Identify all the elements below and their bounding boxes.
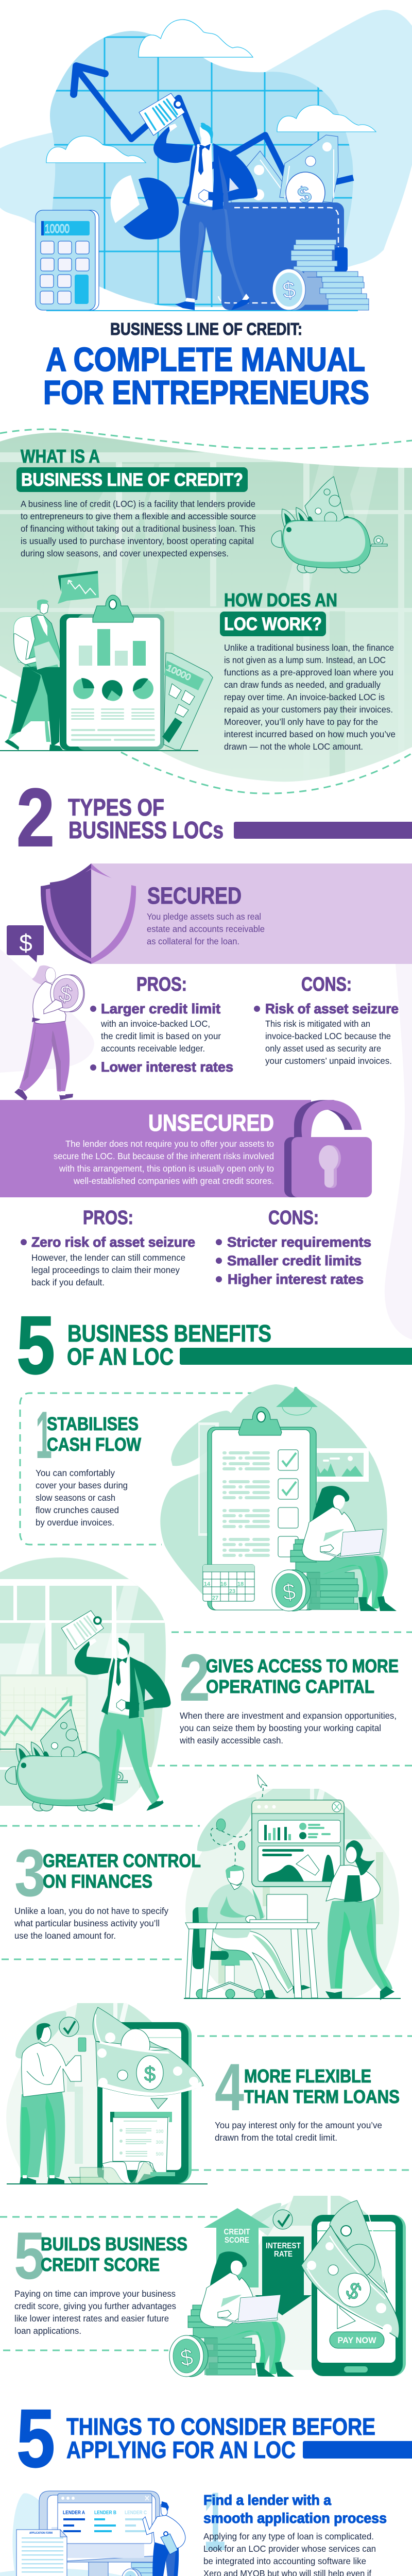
hero background blobs (0, 10, 412, 268)
icon: paper plane with dashed route (211, 1775, 267, 1886)
panel: secured: as collateral for the loan. (147, 936, 239, 946)
cons: secured: Risk of asset seizure (265, 1001, 399, 1016)
pros: unsecured: back if you default. (31, 1277, 105, 1287)
illustration: checklist with woman on coins: 18 (237, 1581, 244, 1587)
panel: what is and how it works background (0, 433, 412, 783)
title: FOR ENTREPRENEURS (43, 374, 369, 411)
icon: wallet (218, 202, 348, 310)
illustration: checklist with woman on coins: 23 (229, 1588, 235, 1595)
pros: unsecured: Zero risk of asset seizure (31, 1234, 195, 1250)
icon: interest rate down arrow: RATE (274, 2250, 293, 2259)
heading: 5 things to consider: APPLYING FOR AN LOC (66, 2436, 296, 2463)
title (43, 319, 369, 411)
panel: secured: SECURED (147, 883, 242, 909)
text block: what is an LOC: is usually used to purchase inventory, boost operating capital (21, 536, 254, 546)
benefit 2 text: When there are investment and expansion opportunities, (180, 1710, 397, 1721)
heading: how does an LOC work: HOW DOES AN (224, 589, 337, 611)
item 1: find a lender: Look for an LOC provider whose services can (203, 2544, 376, 2554)
text block: how an LOC works: is not given as a lump sum. Instead, an LOC (224, 655, 386, 665)
benefit 5 text: credit score, giving you further advantages (14, 2301, 176, 2311)
panel: secured (91, 863, 412, 964)
text block: what is an LOC: of financing without taking out a traditional business loan. This (21, 523, 255, 534)
heading: how does an LOC work (220, 589, 337, 636)
cons: secured: CONS: (301, 974, 352, 995)
cons: unsecured (216, 1207, 371, 1287)
icon: dollar speech bubble (7, 925, 44, 962)
heading: 5 business benefits of an LOC: 5 (16, 1299, 55, 1391)
icon: phone with receipt: 100 (156, 2129, 164, 2134)
heading: 5 things to consider (16, 2392, 412, 2484)
icon: piggy bank 2 (5, 1709, 127, 1811)
cons: secured (254, 974, 399, 1066)
text block: what is an LOC: during slow seasons, and cover unexpected expenses. (21, 548, 229, 558)
cons: unsecured: Higher interest rates (228, 1272, 364, 1287)
title: A COMPLETE MANUAL (46, 341, 365, 378)
illustration: seated man at desk (185, 1866, 319, 1999)
item 1: find a lender: be integrated into accounting software like (203, 2556, 366, 2566)
illustration: woman on coins (169, 2251, 294, 2377)
panel: unsecured (0, 1100, 311, 1197)
cons: secured: your customers’ unpaid invoices. (265, 1056, 392, 1066)
benefit 5 text: loan applications. (14, 2326, 81, 2336)
benefit 1 text: flow crunches caused (36, 1505, 119, 1515)
dashed wave bottom (121, 752, 412, 793)
icon: phone pay now (312, 2215, 406, 2376)
heading: how does an LOC work: LOC WORK? (224, 614, 322, 634)
benefit 1 text (36, 1397, 141, 1528)
pros: secured (90, 974, 233, 1075)
benefit 1 text: slow seasons or cash (36, 1493, 115, 1503)
illustration: businessman 2 (61, 1611, 171, 1811)
icon: money notes and coin in wallet (230, 135, 338, 213)
benefit 5 text: BUILDS BUSINESS (41, 2233, 187, 2255)
divider: benefit 3 top (0, 1825, 200, 1827)
panel: unsecured: with this arrangement, this option is usually open only to (59, 1163, 274, 1174)
benefit 5 text: 5 (14, 2218, 45, 2293)
pros: secured: Lower interest rates (101, 1059, 233, 1075)
item 1: find a lender: Applying for any type of loan is complicated. (203, 2531, 374, 2541)
panel: secured: You pledge assets such as real (147, 911, 261, 922)
panel: secured: estate and accounts receivable (147, 924, 265, 934)
text block: how an LOC works (224, 642, 396, 752)
text block: how an LOC works: interest incurred based on how much you’ve (224, 729, 396, 739)
icon: phone with receipt: 300 (156, 2140, 164, 2145)
icon: coin stacks (272, 240, 369, 310)
divider: benefit 4 top (197, 2035, 412, 2037)
benefit 2 text: with easily accessible cash. (179, 1735, 283, 1745)
illustration: team at desk background (184, 1789, 401, 1999)
benefit 1 text: cover your bases during (36, 1480, 128, 1490)
pros: unsecured: PROS: (83, 1207, 133, 1229)
benefit 5 text: CREDIT SCORE (41, 2254, 160, 2275)
heading: 2 types of business LOCs (16, 771, 412, 863)
icon: calculator (36, 210, 358, 311)
benefit 4 text: You pay interest only for the amount you’ve (215, 2120, 382, 2130)
item 1: find a lender: 1 (203, 2475, 226, 2568)
pros: unsecured: However, the lender can still commence (31, 1252, 185, 1263)
icon: banknote (93, 2007, 203, 2109)
dashed wave bottom left (0, 695, 47, 717)
benefit 1 text: CASH FLOW (47, 1434, 141, 1455)
item 1: find a lender: smooth application process (203, 2510, 387, 2526)
divider: benefit 2 top (171, 1631, 412, 1633)
title: BUSINESS LINE OF CREDIT: (110, 319, 302, 338)
icon: interest rate down arrow: INTEREST (266, 2242, 301, 2250)
background: pale blue shapes (0, 2493, 195, 2576)
divider: benefit 5 bottom (3, 2349, 168, 2351)
illustration: businessman with clipboard (139, 93, 258, 310)
benefit 5 text (14, 2218, 187, 2336)
illustration: standing woman with tablet (296, 1840, 394, 2000)
icon: phone pay now: PAY NOW (338, 2335, 376, 2345)
icon: coin stacks: $ (281, 277, 297, 303)
icon: coin dollar sign: $ (179, 2345, 195, 2371)
panel: unsecured: secure the LOC. But because of the inherent risks involved (54, 1151, 274, 1161)
heading: 5 business benefits of an LOC: BUSINESS BENEFITS (67, 1320, 271, 1347)
icon: piggy bank (271, 477, 387, 573)
text block: how an LOC works: functions as a pre-approved loan where you (224, 667, 393, 677)
illustration: lender comparison: LENDER C (125, 2510, 147, 2516)
icon: credit score up arrow: SCORE (225, 2236, 249, 2245)
benefit 3 text: GREATER CONTROL (43, 1850, 201, 1871)
pros: secured: Larger credit limit (101, 1001, 220, 1016)
pros: unsecured (21, 1207, 195, 1287)
illustration: checklist with woman on coins: $ (281, 1579, 297, 1605)
dashed wave top (0, 429, 412, 449)
text block: how an LOC works: Unlike a traditional business loan, the finance (224, 642, 394, 653)
pros: secured: accounts receivable ledger. (101, 1043, 205, 1054)
icon: shield (41, 863, 136, 964)
icon: money notes and coin in wallet: $ (294, 181, 315, 209)
text block: what is an LOC: A business line of credit (LOC) is a facility that lenders provide (21, 499, 255, 509)
illustration: lender comparison: LENDER B (94, 2510, 116, 2516)
benefit 2 text: OPERATING CAPITAL (206, 1676, 374, 1697)
benefit 1 text: 1 (36, 1397, 52, 1472)
item 1: find a lender: Find a lender with a (203, 2492, 331, 2508)
illustration: man presenting chart clipboard (0, 571, 213, 751)
background: pale purple shapes (0, 949, 412, 1340)
icon: phone with receipt: 500 (156, 2151, 164, 2157)
icon: credit score up arrow: CREDIT (224, 2228, 250, 2236)
illustration: man presenting chart clipboard: 10000 (165, 663, 193, 683)
illustration: checklist with woman on coins (160, 1384, 397, 1611)
cons: secured: only asset used as security are (265, 1043, 381, 1054)
benefit 3 text: what particular business activity you’ll (14, 1918, 160, 1928)
illustration: checklist with woman on coins: 16 (220, 1581, 227, 1587)
icon: cloud right (277, 105, 376, 132)
benefit 3 text (14, 1835, 201, 1941)
icon: dollar speech bubble: $ (19, 929, 32, 956)
illustration: dashboard window (252, 1800, 344, 1887)
pros: secured: PROS: (136, 974, 187, 995)
icon: calculator: 10000 (45, 222, 70, 236)
illustration: benefit 5 background (242, 2196, 381, 2370)
icon: cloud left (46, 136, 146, 163)
heading: 5 business benefits of an LOC (16, 1299, 412, 1391)
text block: what is an LOC (21, 499, 256, 558)
heading: 5 things to consider: 5 (16, 2392, 55, 2484)
benefit 3 text: 3 (14, 1835, 46, 1910)
icon: pie chart (111, 175, 179, 240)
panel: unsecured: The lender does not require you to offer your assets to (65, 1139, 274, 1149)
illustration: checklist with woman on coins: 27 (212, 1595, 218, 1601)
illustration: woman holding coin: $ (57, 980, 74, 1008)
text block: how an LOC works: drawn — not the whole LOC amount. (224, 741, 363, 752)
cons: unsecured: CONS: (268, 1207, 319, 1229)
text block: how an LOC works: repay over time. An invoice-backed LOC is (224, 692, 385, 702)
hero chart panel (46, 31, 360, 307)
icon: banknote: $ (144, 2063, 156, 2086)
benefit 4 text: 4 (215, 2049, 244, 2125)
text block: how an LOC works: repaid as your customers pay their invoices. (224, 704, 393, 715)
benefit 4 text (215, 2049, 400, 2143)
divider: benefit 2 bottom (158, 1765, 412, 1766)
divider: benefit 4 bottom (192, 2169, 412, 2171)
heading: what is a business line of credit (16, 446, 248, 492)
pros: unsecured: legal proceedings to claim their money (31, 1265, 180, 1275)
panel: unsecured: well-established companies with great credit scores. (73, 1176, 274, 1186)
illustration: man with phone (7, 2017, 208, 2184)
text block: what is an LOC: to entrepreneurs to give them a flexible and accessible source (21, 511, 256, 521)
icon: interest rate down arrow (255, 2236, 312, 2315)
text block: how an LOC works: can draw funds as needed, and gradually (224, 680, 381, 690)
illustration: benefit 2 window background (0, 1557, 170, 1806)
divider: benefit 3 bottom (2, 1959, 188, 1960)
illustration: checklist with woman on coins: 14 (204, 1581, 211, 1587)
icon: open padlock (284, 1100, 372, 1197)
heading: 2 types of business LOCs: BUSINESS LOCs (68, 817, 224, 843)
heading: 2 types of business LOCs: 2 (16, 771, 55, 863)
benefit 2 text (179, 1640, 399, 1745)
heading: what is a business line of credit: BUSINESS LINE OF CREDIT? (21, 470, 243, 490)
benefit 4 text: MORE FLEXIBLE (244, 2065, 371, 2087)
panel: unsecured: UNSECURED (148, 1110, 274, 1136)
cons: unsecured: Stricter requirements (227, 1234, 371, 1250)
icon: check circle (273, 2210, 293, 2229)
illustration: chart board (0, 1675, 87, 1752)
benefit 1 text: STABILISES (47, 1413, 139, 1434)
cons: secured: invoice-backed LOC because the (265, 1031, 391, 1041)
illustration: lender comparison (15, 2491, 185, 2576)
benefit 3 text: use the loaned amount for. (14, 1930, 116, 1941)
icon: banknote on phone: $ (341, 2277, 366, 2305)
cons: unsecured: Smaller credit limits (227, 1253, 362, 1268)
icon: phone with receipt (68, 2022, 192, 2183)
benefit 2 text: 2 (179, 1640, 210, 1715)
benefit 4 text: drawn from the total credit limit. (215, 2132, 337, 2143)
text block: how an LOC works: Moreover, you’ll only have to pay for the (224, 717, 378, 727)
pros: secured: with an invoice-backed LOC, (100, 1019, 210, 1029)
heading: what is a business line of credit: WHAT IS A (21, 446, 100, 467)
benefit 3 text: Unlike a loan, you do not have to specify (14, 1906, 168, 1916)
icon: rising arrow line (74, 66, 353, 192)
icon: credit score up arrow (204, 2208, 270, 2287)
benefit 3 text: ON FINANCES (43, 1871, 152, 1892)
benefit 2 text: you can seize them by boosting your working capital (180, 1723, 381, 1733)
illustration: woman holding coin (14, 965, 84, 1101)
benefit 5 text: like lower interest rates and easier future (14, 2313, 169, 2324)
benefit 5 text: Paying on time can improve your business (14, 2289, 176, 2299)
cons: secured: This risk is mitigated with an (265, 1019, 370, 1029)
benefit 1 text: You can comfortably (36, 1468, 115, 1478)
benefit 1 text: by overdue invoices. (36, 1517, 114, 1528)
illustration: lender comparison: LENDER A (63, 2510, 85, 2516)
item 1: find a lender (203, 2475, 387, 2576)
icon: cloud top (139, 20, 253, 57)
heading: 5 business benefits of an LOC: OF AN LOC (67, 1343, 174, 1370)
illustration: benefit 4 background (6, 2003, 178, 2184)
heading: 2 types of business LOCs: TYPES OF (68, 794, 164, 821)
dashed box: benefit 1 (20, 1393, 255, 1545)
illustration: lender comparison: APPLICATION FORM (29, 2532, 53, 2535)
pros: secured: the credit limit is based on your (101, 1031, 221, 1041)
divider: benefit 5 top (0, 2216, 221, 2217)
icon: banknote on phone (301, 2200, 399, 2338)
